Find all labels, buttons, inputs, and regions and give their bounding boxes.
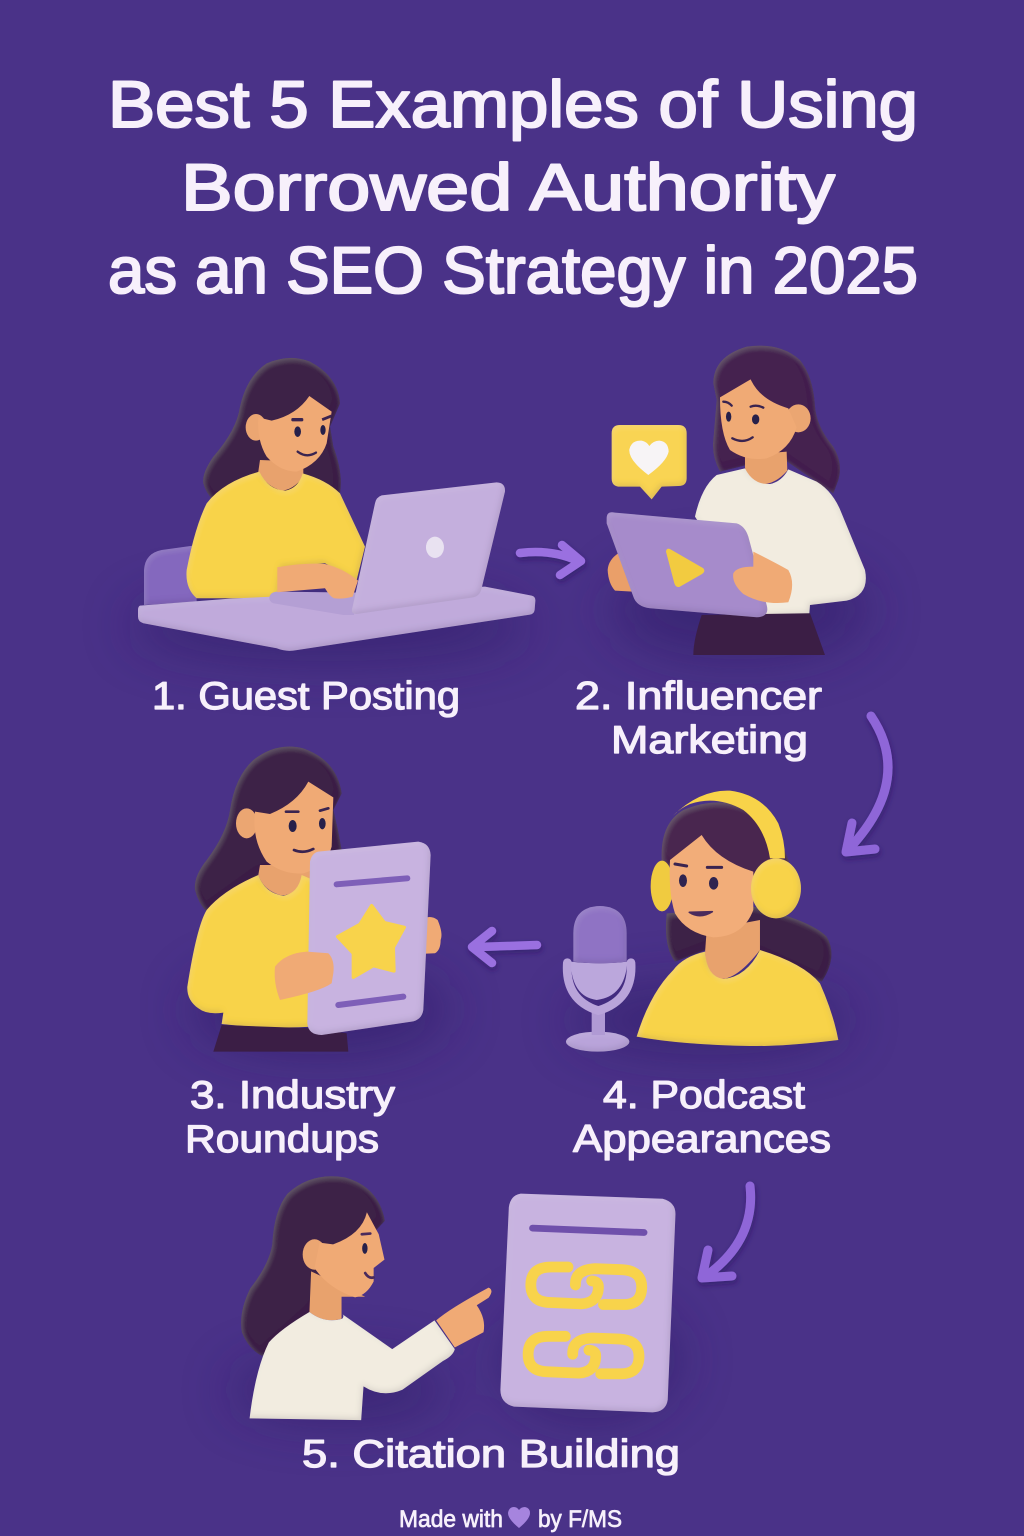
chain link top bbox=[531, 1267, 642, 1305]
title: as an SEO Strategy in 2025 bbox=[108, 233, 918, 307]
star bbox=[338, 906, 404, 977]
hair bbox=[203, 358, 341, 500]
footer credit bbox=[399, 1506, 622, 1533]
headband bbox=[673, 791, 785, 858]
back hair bbox=[666, 907, 831, 982]
arrow: step 1 to step 2 bbox=[520, 545, 581, 575]
ear bbox=[786, 404, 811, 432]
eyes and mouth bbox=[291, 415, 332, 455]
card bbox=[307, 842, 431, 1035]
ear bbox=[236, 808, 257, 838]
label: podcast appearances: 4. Podcast bbox=[603, 1074, 805, 1117]
face bbox=[314, 1212, 384, 1297]
ear bbox=[246, 414, 266, 441]
label: podcast appearances: Appearances bbox=[573, 1118, 831, 1161]
label: citation building: 5. Citation Building bbox=[302, 1433, 680, 1476]
desk bbox=[138, 587, 535, 651]
neck bbox=[309, 1271, 365, 1320]
microphone bbox=[566, 906, 631, 1052]
hair bbox=[241, 1176, 385, 1356]
skirt bbox=[693, 613, 825, 655]
soft shadows under the illustrations bbox=[130, 560, 870, 1420]
eyes and mouth bbox=[286, 808, 328, 852]
card lines bbox=[337, 878, 407, 1005]
neck bbox=[705, 920, 760, 979]
neck bbox=[258, 865, 310, 895]
chair back bbox=[144, 545, 197, 605]
footer credit: Made with bbox=[399, 1506, 503, 1533]
right ear cup bbox=[751, 858, 801, 918]
title: Best 5 Examples of Using bbox=[108, 67, 918, 141]
tablet bbox=[607, 512, 767, 617]
sweater bbox=[637, 950, 838, 1046]
chain link bottom bbox=[528, 1336, 639, 1374]
speech bubble bbox=[612, 425, 687, 499]
title: Borrowed Authority bbox=[181, 150, 835, 224]
laptop screen bbox=[352, 482, 505, 614]
hair bbox=[195, 747, 342, 912]
left ear cup bbox=[651, 861, 673, 911]
neck bbox=[745, 452, 787, 484]
laptop base bbox=[269, 592, 357, 615]
sweater bbox=[186, 472, 365, 598]
arrow: step 4 to step 3 bbox=[472, 931, 537, 963]
hair bbox=[713, 346, 840, 493]
footer credit: by F/MS bbox=[538, 1506, 622, 1533]
panel: podcast appearances illustration bbox=[566, 791, 838, 1052]
card line bbox=[533, 1228, 644, 1233]
left hand bbox=[608, 553, 633, 592]
label: industry roundups: 3. Industry bbox=[190, 1074, 396, 1117]
document card bbox=[500, 1194, 675, 1412]
face bbox=[720, 379, 797, 459]
face bbox=[258, 396, 332, 472]
pointing hand bbox=[436, 1288, 491, 1347]
sweater bbox=[695, 468, 866, 617]
heart bbox=[629, 441, 669, 475]
panel: influencer marketing illustration bbox=[607, 346, 866, 655]
sweater bbox=[250, 1312, 455, 1420]
hand on keyboard bbox=[277, 564, 358, 599]
neck bbox=[258, 460, 303, 491]
title bbox=[108, 67, 918, 307]
label: influencer marketing: Marketing bbox=[611, 719, 808, 762]
right hand bbox=[733, 552, 792, 603]
label: podcast appearances bbox=[573, 1074, 831, 1161]
left hand bbox=[275, 952, 334, 1000]
eye and mouth bbox=[362, 1234, 374, 1278]
ear bbox=[303, 1239, 326, 1270]
label: industry roundups: Roundups bbox=[185, 1118, 379, 1161]
label: guest posting: 1. Guest Posting bbox=[152, 675, 460, 718]
skirt bbox=[213, 1025, 348, 1052]
play icon bbox=[666, 549, 704, 587]
top hair bbox=[662, 802, 792, 880]
eyes and mouth bbox=[675, 864, 722, 916]
face bbox=[670, 835, 753, 937]
sweater bbox=[187, 875, 313, 1028]
eyes and mouth bbox=[723, 402, 763, 441]
panel: citation building illustration bbox=[241, 1176, 675, 1420]
panel: industry roundups illustration bbox=[187, 747, 441, 1052]
panel: guest posting illustration bbox=[138, 358, 535, 651]
fingers behind card bbox=[418, 917, 441, 954]
arrow: step 2 to step 4 bbox=[846, 716, 888, 852]
label: influencer marketing bbox=[575, 675, 822, 762]
laptop logo bbox=[426, 537, 444, 558]
label: industry roundups bbox=[185, 1074, 396, 1161]
label: influencer marketing: 2. Influencer bbox=[575, 675, 822, 718]
arrow: step 4 to step 5 bbox=[702, 1186, 751, 1278]
face bbox=[254, 782, 333, 874]
